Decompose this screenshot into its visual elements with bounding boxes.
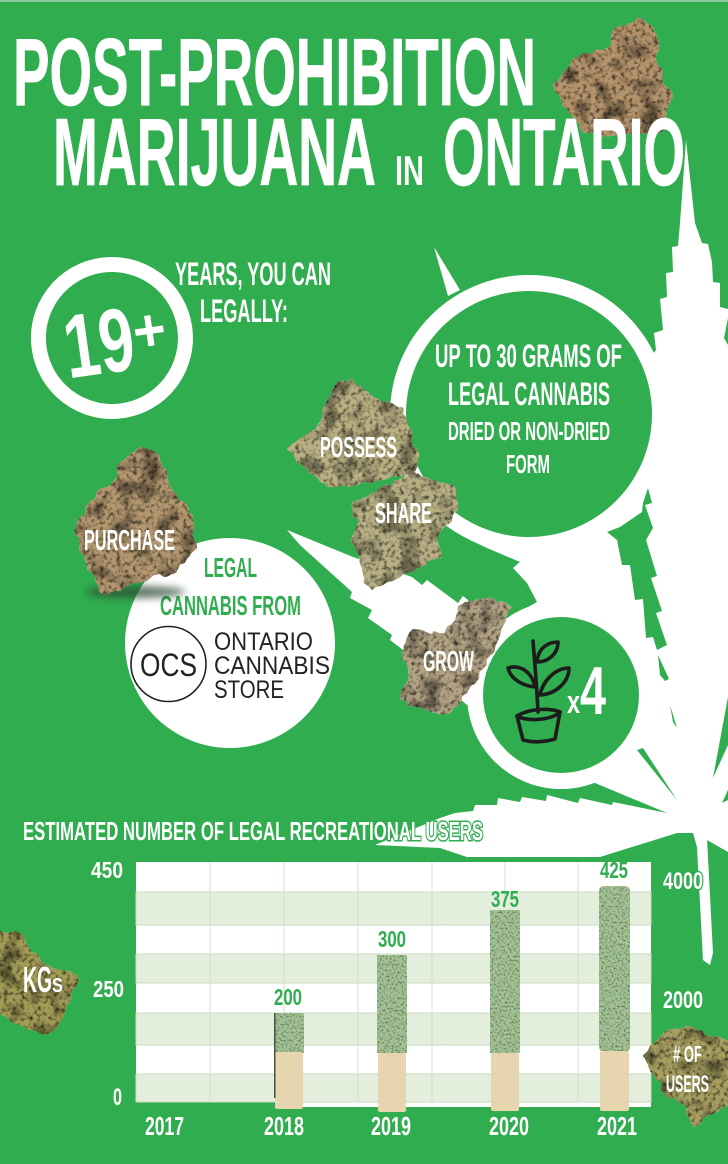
- panel: grow limit circle: 4: [580, 653, 606, 729]
- age badge: 19+: 19: [58, 289, 141, 398]
- logo: OCS: [131, 626, 330, 704]
- x axis year labels: 2018: [264, 1111, 304, 1141]
- icon: users bud axis title: # OF: [673, 1041, 702, 1067]
- bar: 2018 value 200: [274, 984, 304, 1109]
- right axis labels: [663, 868, 703, 1014]
- age badge: 19+: +: [128, 295, 170, 366]
- logo: OCS: ONTARIO: [214, 628, 313, 656]
- logo: OCS: CANNABIS: [214, 652, 330, 680]
- bar: 2021 value 425: [599, 857, 630, 1111]
- x axis year labels: 2020: [489, 1111, 529, 1141]
- icon: cannabis bud top right: [558, 22, 667, 132]
- illustration: white cannabis leaf: [287, 140, 728, 965]
- logo: OCS: STORE: [214, 676, 284, 704]
- chart heading: ESTIMATED NUMBER OF LEGAL RECREATIONAL USERS: [23, 816, 483, 846]
- panel: possession limit circle: FORM: [506, 449, 550, 479]
- intro text: YEARS, YOU CAN: [175, 256, 331, 292]
- bar: 2020 value 375: [490, 886, 520, 1111]
- x axis year labels: 2019: [371, 1111, 411, 1141]
- panel: possession limit circle: DRIED OR NON-DRIED: [448, 416, 610, 446]
- chart: joints as bars by year: [136, 857, 651, 1112]
- x axis year labels: 2017: [145, 1111, 184, 1141]
- bar: 2018 value 200: 200: [274, 984, 302, 1010]
- logo: OCS: OCS: [140, 647, 197, 683]
- right axis labels: 2000: [663, 987, 703, 1014]
- panel: Ontario Cannabis Store circle: CANNABIS FROM: [160, 590, 301, 621]
- panel: grow limit circle: x: [567, 684, 580, 720]
- bar: 2019 value 300: 300: [378, 926, 406, 952]
- bar: 2021 value 425: 425: [600, 857, 628, 883]
- icon: KGs bud axis title: [0, 934, 74, 1030]
- panel: Ontario Cannabis Store circle: LEGAL: [204, 552, 257, 583]
- x axis year labels: 2021: [597, 1111, 637, 1141]
- icon: grow bud: GROW: [423, 646, 474, 678]
- right axis labels: 4000: [663, 868, 703, 895]
- panel: possession limit circle: LEGAL CANNABIS: [448, 376, 610, 412]
- icon: purchase bud: [78, 449, 191, 598]
- left axis labels: 450: [91, 857, 123, 883]
- icon: purchase bud: PURCHASE: [84, 525, 175, 557]
- icon: users bud axis title: [646, 1029, 728, 1122]
- age badge: 19+: [29, 255, 195, 421]
- bar: 2019 value 300: [377, 926, 407, 1112]
- left axis labels: [91, 857, 124, 1111]
- panel: Ontario Cannabis Store circle: [125, 538, 335, 748]
- icon: possess bud: POSSESS: [320, 432, 397, 464]
- x axis year labels: [145, 1111, 637, 1141]
- panel: possession limit circle: [390, 275, 668, 553]
- icon: KGs bud axis title: KG: [23, 959, 52, 1000]
- icon: potted plant: [508, 641, 569, 742]
- left axis labels: 250: [93, 976, 124, 1002]
- icon: share bud: [354, 477, 454, 585]
- icon: grow bud: [404, 601, 506, 711]
- title: MARIJUANA: [53, 99, 376, 206]
- panel: grow limit circle: [467, 601, 655, 789]
- icon: possess bud: [291, 384, 414, 483]
- bar: 2020 value 375: 375: [491, 886, 519, 912]
- icon: share bud: SHARE: [375, 498, 432, 530]
- left axis labels: 0: [113, 1084, 122, 1111]
- intro text: LEGALLY:: [200, 293, 288, 329]
- intro text: [175, 256, 331, 329]
- icon: KGs bud axis title: S: [52, 975, 63, 997]
- title: [13, 19, 685, 206]
- title: IN: [395, 147, 424, 194]
